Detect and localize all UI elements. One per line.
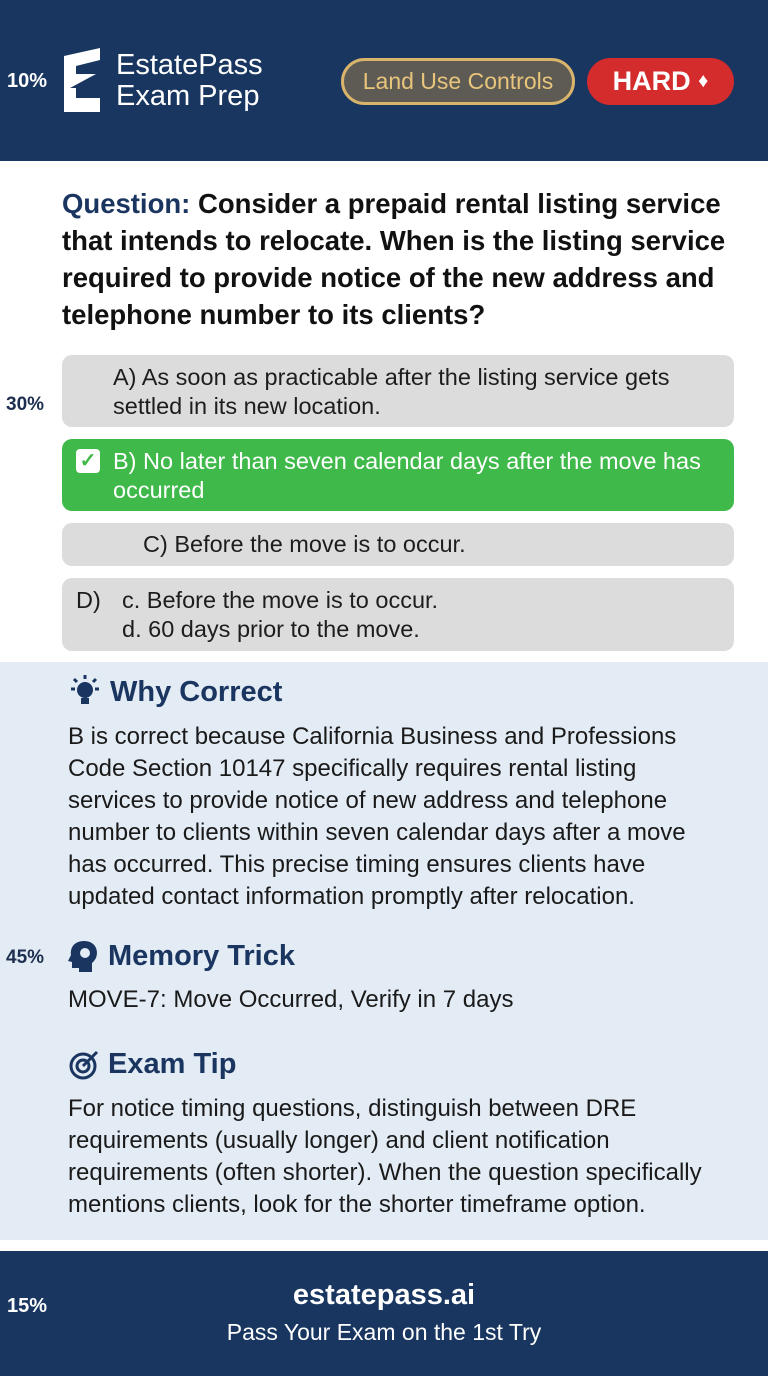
option D <box>62 578 734 651</box>
footer brand: estatepass.ai <box>293 1279 475 1311</box>
text: exam tip: requirements (often shorter). When the question specifically <box>68 1159 702 1186</box>
explanation panel <box>0 662 768 1240</box>
difficulty badge: HARD <box>613 66 691 96</box>
text: why correct: updated contact information promptly after relocation. <box>68 883 635 910</box>
tagline: Pass Your Exam on the 1st Try <box>227 1319 541 1345</box>
percent 10: 10% <box>7 70 47 92</box>
icon: check <box>76 449 100 473</box>
heading: exam tip: Exam Tip <box>108 1048 236 1080</box>
option C <box>62 523 734 566</box>
logo text <box>116 49 263 112</box>
logo icon <box>64 48 100 112</box>
footer <box>0 1251 768 1376</box>
text: memory trick: MOVE-7: Move Occurred, Verify in 7 days <box>68 986 514 1013</box>
text: why correct <box>68 723 686 910</box>
text: why correct: number to clients within seven calendar days after a move <box>68 819 686 846</box>
heading: why correct: Why Correct <box>110 676 282 708</box>
logo text: Exam Prep <box>116 80 259 112</box>
option A: settled in its new location. <box>113 393 381 419</box>
category pill <box>341 58 575 105</box>
difficulty badge <box>587 58 734 105</box>
text: why correct: B is correct because California Business and Professions <box>68 723 676 750</box>
option A: A) As soon as practicable after the listing service gets <box>113 364 669 390</box>
question: that intends to relocate. When is the listing service <box>62 225 725 256</box>
text: exam tip: requirements (usually longer) and client notification <box>68 1127 610 1154</box>
option B correct: occurred <box>113 477 204 503</box>
icon: check: ✓ <box>80 450 96 472</box>
text: why correct: services to provide notice of new address and telephone <box>68 787 667 814</box>
text: exam tip <box>68 1095 702 1218</box>
option B correct: B) No later than seven calendar days after the move has <box>113 448 701 474</box>
option D: d. 60 days prior to the move. <box>122 616 420 642</box>
option A <box>62 355 734 427</box>
question: Question: Consider a prepaid rental listing service <box>62 188 721 219</box>
option D: c. Before the move is to occur. <box>122 587 438 613</box>
text: why correct: Code Section 10147 specifically requires rental listing <box>68 755 636 782</box>
option D: D) <box>76 587 101 613</box>
percent 45: 45% <box>6 947 44 968</box>
logo text: EstatePass <box>116 49 263 81</box>
header <box>0 0 768 161</box>
category pill: Land Use Controls <box>363 68 553 94</box>
question: required to provide notice of the new address and <box>62 262 714 293</box>
option B correct <box>62 439 734 511</box>
heading: memory trick: Memory Trick <box>108 940 295 972</box>
percent 15: 15% <box>7 1295 47 1317</box>
text: exam tip: mentions clients, look for the shorter timeframe option. <box>68 1191 646 1218</box>
question <box>62 188 725 330</box>
option C: C) Before the move is to occur. <box>143 531 466 557</box>
text: why correct: has occurred. This precise timing ensures clients have <box>68 851 645 878</box>
text: exam tip: For notice timing questions, distinguish between DRE <box>68 1095 636 1122</box>
percent 30: 30% <box>6 394 44 415</box>
difficulty badge: ♦ <box>698 70 708 92</box>
question: telephone number to its clients? <box>62 299 485 330</box>
